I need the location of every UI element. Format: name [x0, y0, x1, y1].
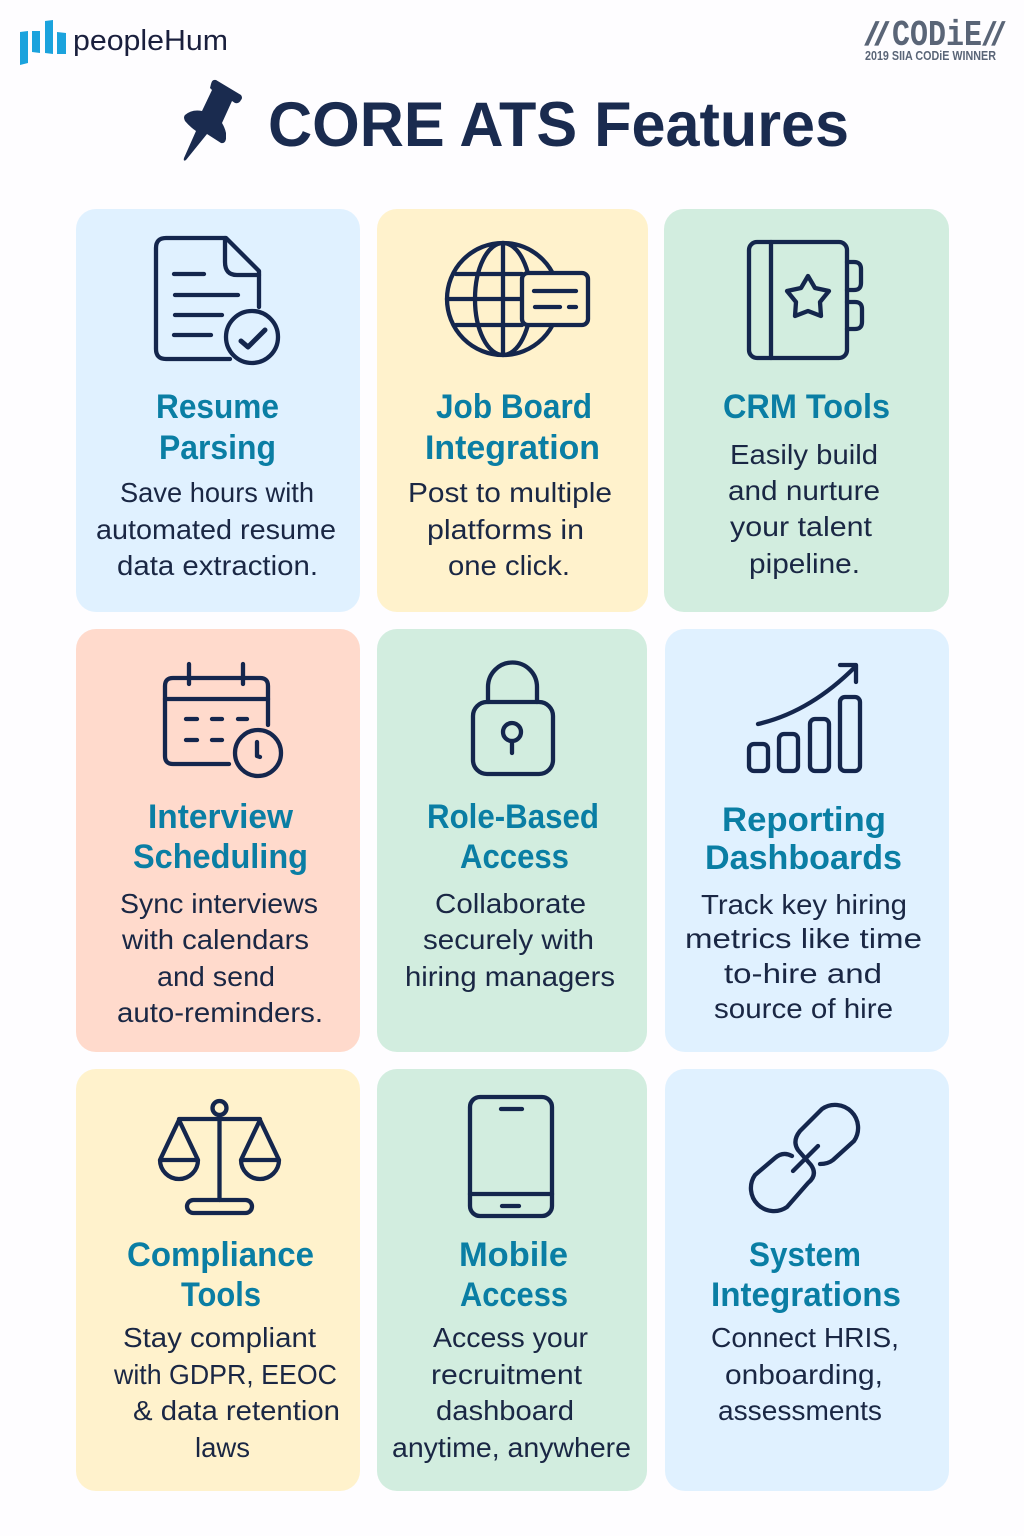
heading: interview scheduling: Interview — [148, 798, 294, 836]
panel: job board integration — [377, 209, 648, 612]
text: job board description: platforms in — [427, 514, 584, 545]
icon: globe with card — [447, 243, 588, 355]
logo: peopleHum — [20, 20, 228, 65]
panel: role-based access — [377, 629, 647, 1052]
text: interview description: with calendars — [121, 924, 309, 955]
text: CRM description: and nurture — [728, 475, 880, 506]
heading: job board integration — [425, 388, 600, 467]
text: reporting description: Track key hiring — [701, 889, 907, 920]
panel: CRM tools — [664, 209, 949, 612]
text: job board description — [408, 477, 612, 581]
text: job board description: Post to multiple — [408, 477, 612, 508]
heading: reporting dashboards: Dashboards — [705, 839, 902, 877]
text: compliance description — [113, 1322, 340, 1463]
text: CRM description: Easily build — [730, 439, 878, 470]
panel: resume parsing — [76, 209, 360, 612]
text: role-based description — [405, 888, 615, 992]
heading: resume parsing — [156, 388, 279, 467]
title: CORE ATS Features — [268, 90, 849, 160]
heading: system integrations — [711, 1236, 901, 1314]
heading: interview scheduling — [133, 798, 308, 876]
text: integrations description — [711, 1322, 899, 1426]
heading: mobile access: Mobile — [459, 1236, 568, 1274]
heading: system integrations: Integrations — [711, 1276, 901, 1314]
heading: reporting dashboards — [705, 801, 902, 877]
text: compliance description: laws — [195, 1432, 250, 1463]
icon: balance scale — [160, 1101, 279, 1213]
heading: role-based access — [427, 798, 599, 876]
text: reporting description: to-hire and — [724, 958, 882, 989]
heading: reporting dashboards: Reporting — [722, 801, 886, 839]
heading: resume parsing: Parsing — [159, 429, 276, 467]
text: mobile description — [392, 1322, 631, 1463]
icon: rising bar chart — [749, 665, 860, 771]
text: resume parsing description: automated resume — [96, 514, 336, 545]
text: interview description: auto-reminders. — [117, 997, 323, 1028]
text: reporting description: source of hire — [714, 993, 893, 1024]
text: role-based description: Collaborate — [435, 888, 586, 919]
text: mobile description: dashboard — [436, 1395, 574, 1426]
heading: mobile access — [459, 1236, 568, 1314]
text: CRM description: pipeline. — [749, 548, 860, 579]
text: compliance description: Stay compliant — [123, 1322, 316, 1353]
icon: padlock — [473, 662, 553, 774]
heading: interview scheduling: Scheduling — [133, 838, 308, 876]
heading: job board integration: Integration — [425, 429, 600, 467]
text: CRM description — [728, 439, 880, 579]
text: resume parsing description — [96, 477, 336, 581]
heading: compliance tools — [127, 1236, 314, 1314]
heading: job board integration: Job Board — [436, 388, 592, 426]
panel: system integrations — [665, 1069, 949, 1491]
icon: chain link — [751, 1105, 858, 1211]
text: resume parsing description: data extraction. — [117, 550, 318, 581]
icon: notebook with star — [749, 242, 862, 358]
text: integrations description: onboarding, — [725, 1359, 883, 1390]
icon: mobile phone — [470, 1097, 552, 1216]
icon: push pin — [184, 80, 242, 161]
text: interview description: and send — [157, 961, 275, 992]
badge: CODiE winner: 2019 SIIA CODiE WINNER — [865, 48, 996, 63]
panel: reporting dashboards — [665, 629, 949, 1052]
text: compliance description: with GDPR, EEOC — [113, 1359, 337, 1390]
text: CRM description: your talent — [730, 511, 872, 542]
heading: compliance tools: Tools — [181, 1276, 261, 1314]
text: role-based description: hiring managers — [405, 961, 615, 992]
badge: CODiE winner: // — [980, 16, 1007, 53]
badge: CODiE winner: // — [862, 16, 891, 53]
heading: CRM tools: CRM Tools — [723, 388, 890, 426]
text: integrations description: assessments — [718, 1395, 882, 1426]
panel: mobile access — [377, 1069, 647, 1491]
text: mobile description: anytime, anywhere — [392, 1432, 631, 1463]
text: interview description: Sync interviews — [120, 888, 318, 919]
heading: role-based access: Access — [460, 838, 569, 876]
text: compliance description: & data retention — [133, 1395, 340, 1426]
text: resume parsing description: Save hours with — [120, 477, 314, 508]
text: job board description: one click. — [448, 550, 570, 581]
text: interview description — [117, 888, 323, 1028]
text: integrations description: Connect HRIS, — [711, 1322, 899, 1353]
heading: compliance tools: Compliance — [127, 1236, 314, 1274]
text: mobile description: recruitment — [431, 1359, 582, 1390]
panel: compliance tools — [76, 1069, 360, 1491]
logo: peopleHum: peopleHum — [73, 25, 228, 57]
panel: interview scheduling — [76, 629, 360, 1052]
text: reporting description — [685, 889, 922, 1024]
icon: calendar with clock — [165, 664, 281, 776]
icon: resume document with check — [156, 238, 278, 363]
text: role-based description: securely with — [423, 924, 594, 955]
badge: CODiE winner — [862, 15, 1007, 63]
heading: system integrations: System — [749, 1236, 861, 1274]
text: reporting description: metrics like time — [685, 923, 922, 954]
badge: CODiE winner: CODiE — [892, 15, 982, 56]
heading: mobile access: Access — [460, 1276, 568, 1314]
heading: role-based access: Role-Based — [427, 798, 599, 836]
text: mobile description: Access your — [433, 1322, 588, 1353]
heading: resume parsing: Resume — [156, 388, 279, 426]
